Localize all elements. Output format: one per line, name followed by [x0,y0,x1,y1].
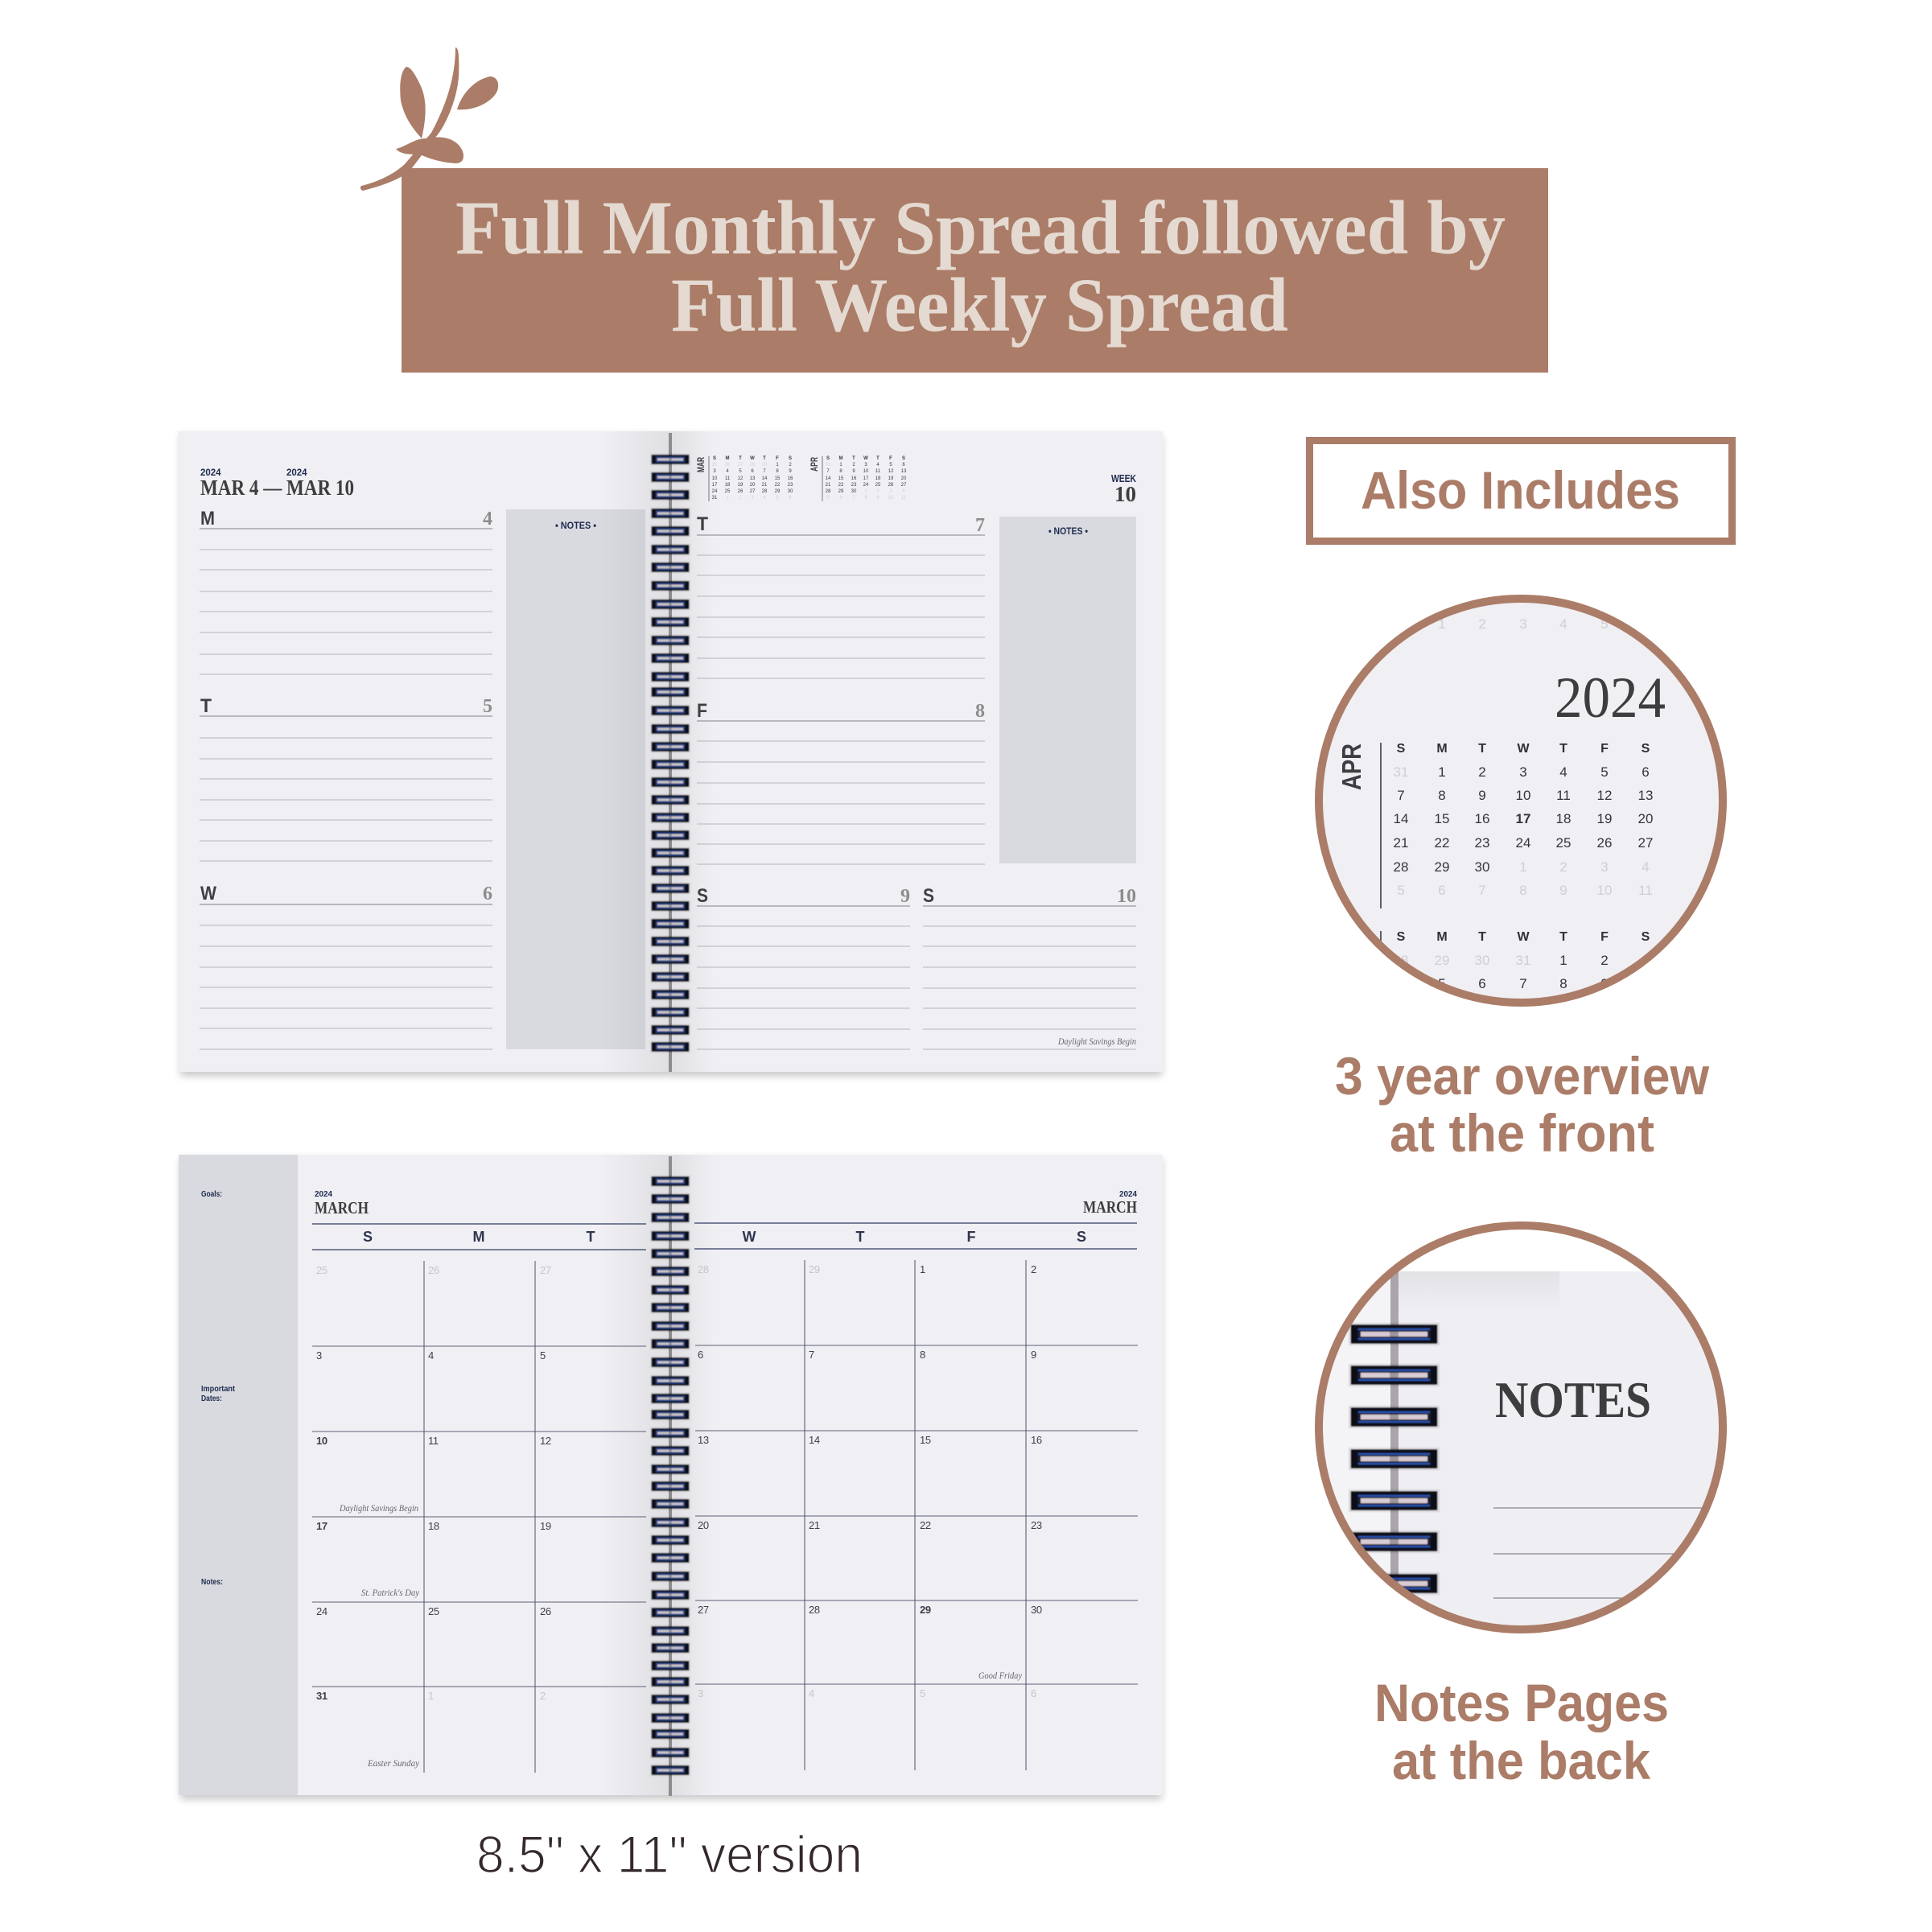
mini calendar: April: S [902,456,905,461]
mini calendar: March: M [726,456,729,461]
circle: 3 year overview calendar: W [1517,930,1530,944]
also includes box: Also Includes [1361,460,1680,520]
left page dates: 5 [540,1349,546,1361]
weekday headers: M [473,1229,484,1245]
left page dates: 18 [428,1520,439,1532]
holiday notes: St. Patrick's Day [361,1588,420,1598]
left page dates: 31 [316,1690,327,1702]
mini calendar: March: 3 [751,496,754,501]
left page dates: 25 [316,1264,327,1276]
mini calendar: April: 7 [852,496,855,501]
mini calendar: April: 2 [876,489,879,494]
right page dates [698,1263,1042,1699]
circle: 3 year overview calendar: S [1642,930,1650,944]
mini calendar: March: 24 [712,489,718,494]
right page dates: 7 [809,1349,814,1361]
mini calendar: March: 23 [788,483,793,488]
day labels: W [200,883,216,904]
mini calendar: April: 3 [864,463,867,468]
mini calendar: March: W [750,456,755,461]
circle: 3 year overview calendar: 23 [1475,835,1489,851]
circle: 3 year overview calendar: 12 [1597,788,1612,803]
circle: 3 year overview calendar: 10 [1597,883,1612,898]
circle: 3 year overview calendar: 4 [1642,859,1650,875]
mini calendar: April: 23 [851,483,857,488]
right page dates: 8 [920,1349,925,1361]
left page dates [316,1264,551,1702]
circle: 3 year overview calendar: 30 [1475,953,1489,968]
circle: 3 year overview calendar: 16 [1475,811,1489,826]
panel: left notes column [506,509,645,1049]
caption: notes pages: at the back [1392,1731,1650,1790]
right page dates: 29 [809,1263,820,1275]
mini calendar: March: 28 [762,489,768,494]
mini calendar: April: 24 [863,483,869,488]
mini calendar: April: 1 [864,489,867,494]
circle: 3 year overview calendar: F [1600,930,1609,944]
mini calendar: March: 3 [713,469,716,474]
banner title: Full Monthly Spread followed by [455,185,1506,270]
circle: 3 year overview calendar: 27 [1516,589,1530,604]
mini calendar: March: 27 [750,489,756,494]
circle: 3 year overview calendar: 7 [1519,976,1527,991]
mini calendar: March: 4 [763,496,766,501]
circle: 3 year overview calendar: 2 [1600,953,1609,968]
circle: 3 year overview calendar: 4 [1559,764,1567,780]
caption: 3 year overview [1335,1046,1710,1163]
mini calendar: April: 2 [852,463,855,468]
caption: 3 year overview: 3 year overview [1335,1046,1710,1106]
circle: 3 year overview calendar: 2 [1559,859,1567,875]
panel: right notes column [999,517,1136,863]
mini calendar: April: 14 [826,476,831,481]
panel: monthly sidebar: Important [201,1385,236,1394]
weekday headers [363,1229,1086,1245]
mini calendar: April: 9 [852,469,855,474]
left page dates: 17 [316,1520,327,1532]
left page dates: 10 [316,1435,327,1447]
mini calendar: April: 10 [863,469,869,474]
circle: 3 year overview calendar: 17 [1516,811,1530,826]
mini calendar: March: S [713,456,716,461]
mini calendar: April: 1 [839,463,842,468]
mini calendar: April: 10 [888,496,894,501]
mini calendar: April: T [852,456,855,461]
mini calendar: March: F [776,456,779,461]
mini calendar: March: 26 [725,463,731,468]
mini calendar: March: 17 [712,483,718,488]
mini calendar: April: 9 [876,496,879,501]
right page dates: 2 [1031,1263,1036,1275]
mini calendar: April: M [838,456,843,461]
circle: 3 year overview calendar: 6 [1478,976,1486,991]
left page dates: 1 [428,1690,434,1702]
mini calendar: March: T [763,456,766,461]
mini calendar: April: W [863,456,868,461]
also includes box [1310,441,1732,541]
mini calendar: March: 2 [739,496,742,501]
mini calendar: March: 4 [726,469,729,474]
right page dates: 14 [809,1434,820,1446]
left month heading [315,1189,369,1217]
right page dates: 1 [920,1263,925,1275]
circle: 3 year overview calendar: 3 [1519,616,1527,632]
calendar grid [312,1223,1138,1773]
circle: 3 year overview calendar: 5 [1600,616,1609,632]
mini calendar: April: 20 [901,476,907,481]
circle: 3 year overview calendar: 8 [1559,976,1567,991]
mini calendar: March: 13 [750,476,756,481]
mini calendar: March: 12 [738,476,744,481]
mini calendar: March: 2 [789,463,792,468]
mini calendar: April: 6 [902,463,905,468]
circle: 3 year overview calendar: 14 [1394,811,1408,826]
right page dates: 6 [1031,1687,1036,1699]
mini calendar: April: 11 [901,496,907,501]
mini calendar: April: 13 [901,469,907,474]
left page dates: 24 [316,1605,327,1617]
circle: 3 year overview calendar: 5 [1438,976,1446,991]
week date heading: 2024 [200,468,221,478]
circle: 3 year overview calendar: 30 [1475,859,1489,875]
circle: 3 year overview calendar: 1 [1559,953,1567,968]
banner [402,168,1548,373]
panel: monthly spread notebook [179,1155,1163,1799]
left page dates: 12 [540,1435,551,1447]
mini calendar: March: 5 [739,469,742,474]
circle: 3 year overview calendar: 26 [1597,835,1612,851]
mini calendar: March: 25 [712,463,718,468]
right page dates: 15 [920,1434,931,1446]
right page dates: 28 [809,1604,820,1616]
mini calendar: April: 25 [875,483,881,488]
circle: 3 year overview calendar: 2 [1478,616,1486,632]
left page dates: 27 [540,1264,551,1276]
left page dates: 3 [316,1349,322,1361]
circle: 3 year overview calendar: S [1397,742,1406,756]
mini calendar: April: 19 [888,476,894,481]
circle: 3 year overview calendar: 1 [1519,859,1527,875]
right page dates: 6 [698,1349,703,1361]
circle: 3 year overview calendar: 11 [1638,883,1653,898]
mini calendar: March: 31 [712,496,718,501]
ruled lines [200,529,1136,1049]
day labels: 10 [1117,886,1136,907]
mini calendar: April: 7 [826,469,830,474]
right page dates: 4 [809,1687,814,1699]
day labels: 4 [483,509,492,529]
circle: 3 year overview calendar: F [1600,742,1609,756]
left page dates: 26 [428,1264,439,1276]
mini calendar: March: 15 [775,476,781,481]
circle: 3 year overview calendar: 9 [1478,788,1486,803]
circle: 3 year overview calendar: T [1478,742,1486,756]
right page dates: 9 [1031,1349,1036,1361]
circle: 3 year overview calendar: 19 [1597,811,1612,826]
mini calendar: April: 21 [826,483,831,488]
mini calendar: April [809,456,907,501]
right page dates: 28 [698,1263,709,1275]
circle: 3 year overview calendar: W [1517,742,1530,756]
circle: 3 year overview calendar: 2024 [1555,665,1666,730]
right page dates: 13 [698,1434,709,1446]
mini calendar: April: 4 [902,489,905,494]
day labels: T [697,513,708,535]
mini calendar: March: 29 [762,463,768,468]
circle: 3 year overview calendar: 6 [1438,883,1446,898]
circle: 3 year overview calendar: 27 [1638,835,1653,851]
right page dates: 20 [698,1519,709,1531]
circle: 3 year overview calendar: 8 [1438,788,1446,803]
circle: 3 year overview calendar: 7 [1478,883,1486,898]
panel: monthly sidebar: Dates: [201,1394,222,1403]
panel: monthly sidebar [179,1155,298,1795]
mini calendar: April: 16 [851,476,857,481]
circle: 3 year overview calendar: 31 [1394,764,1408,780]
circle: 3 year overview calendar: 28 [1394,953,1408,968]
icon: leaf sprig [360,47,498,191]
week date heading [200,468,354,500]
right page dates: 29 [920,1604,931,1616]
weekday headers: F [967,1229,975,1245]
circle: 3 year overview calendar: 11 [1556,788,1571,803]
left page dates: 4 [428,1349,434,1361]
mini calendar: March: T [739,456,742,461]
mini calendar: March: 28 [750,463,756,468]
circle: 3 year overview calendar: 9 [1600,976,1609,991]
mini calendar: March: 25 [725,489,731,494]
right page dates: 23 [1031,1519,1042,1531]
day labels: S [697,885,708,907]
left month heading: 2024 [315,1189,332,1199]
mini calendar: April: 17 [863,476,869,481]
circle: 3 year overview calendar: 21 [1394,835,1408,851]
day labels: M [200,508,215,529]
mini calendar: March: 16 [788,476,793,481]
week number: 10 [1114,482,1136,506]
circle: 3 year overview calendar: 2 [1478,764,1486,780]
mini calendar: April: 27 [901,483,907,488]
mini calendar: March: 27 [738,463,744,468]
circle: notes pages closeup: NOTES [1495,1372,1651,1428]
circle: 3 year overview calendar: M [1436,930,1448,944]
mini calendar: April: 28 [826,489,831,494]
left page dates: 19 [540,1520,551,1532]
circle: 3 year overview calendar: 5 [1397,883,1405,898]
day labels: F [697,700,707,722]
circle: 3 year overview calendar: 20 [1638,811,1653,826]
right month heading: 2024 [1119,1189,1137,1199]
circle: 3 year overview calendar: 3 [1519,764,1527,780]
event note: Daylight Savings Begin [1057,1037,1136,1047]
mini calendar: April: 15 [838,476,844,481]
circle: 3 year overview calendar: 29 [1435,859,1449,875]
panel: left notes column: • NOTES • [555,520,596,531]
circle: 3 year overview calendar: 25 [1556,835,1571,851]
circle: 3 year overview calendar: 1 [1438,616,1446,632]
holiday notes: Easter Sunday [367,1759,420,1769]
size caption: 8.5" x 11" version [476,1825,863,1884]
spiral binding [650,433,690,1072]
circle: 3 year overview calendar: S [1642,742,1650,756]
mini calendar: April: 8 [864,496,867,501]
mini calendar: March: 14 [762,476,768,481]
week date heading: MAR 4 — MAR 10 [200,476,354,500]
right page dates: 21 [809,1519,820,1531]
mini calendar: April: S [826,456,830,461]
left page dates: 26 [540,1605,551,1617]
circle: 3 year overview calendar: 3 [1600,859,1609,875]
holiday notes: Daylight Savings Begin [339,1504,418,1514]
mini calendar: April: 4 [876,463,879,468]
mini calendar: March: 5 [776,496,779,501]
mini calendar: March: 6 [789,496,792,501]
left page dates: 2 [540,1690,546,1702]
circle: 3 year overview calendar: 7 [1397,788,1405,803]
circle: 3 year overview calendar: 28 [1394,859,1408,875]
circle: 3 year overview calendar [1319,589,1723,1003]
mini calendar: March: 1 [776,463,779,468]
mini calendar: March: 20 [750,483,756,488]
left page dates: 25 [428,1605,439,1617]
circle: 3 year overview calendar: 1 [1438,764,1446,780]
mini calendar: March: 7 [763,469,766,474]
weekday headers: T [856,1229,864,1245]
circle: 3 year overview calendar: T [1559,742,1567,756]
mini calendar: April: 11 [875,469,881,474]
day labels: T [200,695,212,717]
right page dates: 3 [698,1687,703,1699]
week number: WEEK [1111,472,1136,484]
spiral binding [650,1156,690,1796]
right page dates: 30 [1031,1604,1042,1616]
holiday notes [339,1504,1023,1769]
circle: 3 year overview calendar: M [1436,742,1448,756]
mini calendar: March: 19 [738,483,744,488]
circle: 3 year overview calendar: S [1397,930,1406,944]
caption: 3 year overview: at the front [1390,1103,1654,1163]
circle: 3 year overview calendar: 8 [1519,883,1527,898]
mini calendar: March: 1 [726,496,729,501]
circle: 3 year overview calendar: T [1478,930,1486,944]
weekday headers: W [742,1229,756,1245]
weekday headers: T [586,1229,595,1245]
mini calendar: March: 6 [751,469,754,474]
week date heading: 2024 [286,468,307,478]
mini calendar: April: 8 [839,469,842,474]
circle: 3 year overview calendar: 9 [1559,883,1567,898]
right page dates: 16 [1031,1434,1042,1446]
panel: monthly sidebar: Goals: [201,1190,222,1199]
left page dates: 11 [428,1435,439,1447]
mini calendar: March: 22 [775,483,781,488]
circle: notes pages closeup [1304,1226,1736,1642]
mini calendar: April: 30 [851,489,857,494]
left month heading: MARCH [315,1198,369,1217]
right page dates: 22 [920,1519,931,1531]
right page dates: 5 [920,1687,925,1699]
caption: notes pages [1374,1673,1669,1790]
mini calendar: April: 5 [826,496,830,501]
mini calendar: April: 5 [889,463,892,468]
circle: 3 year overview calendar: 31 [1516,953,1530,968]
mini calendar: March: 11 [725,476,731,481]
mini calendar: March: 21 [762,483,768,488]
weekday headers: S [363,1229,373,1245]
mini calendar: April: 12 [888,469,894,474]
panel: right notes column: • NOTES • [1048,525,1088,537]
mini calendar: April: 26 [888,483,894,488]
mini calendar: March: 10 [712,476,718,481]
day labels: 8 [975,701,985,722]
circle: 3 year overview calendar: 4 [1559,616,1567,632]
holiday notes: Good Friday [978,1671,1023,1681]
circle: 3 year overview calendar: 15 [1435,811,1449,826]
banner title [455,185,1506,348]
panel: monthly sidebar: Notes: [201,1578,223,1587]
day labels: 9 [900,886,910,907]
circle: 3 year overview calendar: 18 [1556,811,1571,826]
mini calendar: April: 31 [826,463,831,468]
circle: 3 year overview calendar: 22 [1435,835,1449,851]
right month heading [1083,1189,1137,1217]
mini calendar: March: 8 [776,469,779,474]
day labels: 5 [483,696,492,717]
mini calendar: March: 18 [725,483,731,488]
right page dates: 27 [698,1604,709,1616]
mini calendar: April: 22 [838,483,844,488]
banner title: Full Weekly Spread [671,262,1288,348]
mini calendar: March: 29 [775,489,781,494]
panel: weekly spread notebook [178,431,1163,1076]
caption: notes pages: Notes Pages [1374,1673,1669,1732]
mini calendar: April: 29 [838,489,844,494]
circle: 3 year overview calendar: 13 [1638,788,1653,803]
mini calendar: April: T [876,456,879,461]
right month heading: MARCH [1083,1197,1137,1217]
circle: 3 year overview calendar: 10 [1516,788,1530,803]
mini calendar: April: APR [809,457,820,472]
mini calendar: April: F [889,456,892,461]
week number [1111,472,1136,506]
mini calendar: March: 26 [738,489,744,494]
day labels [200,508,1136,907]
circle: 3 year overview calendar: 29 [1435,953,1449,968]
circle: 3 year overview calendar: APR [1337,744,1366,790]
mini calendar: March: MAR [695,457,706,472]
mini calendar: April: 3 [889,489,892,494]
circle: 3 year overview calendar: 24 [1516,835,1530,851]
mini calendar: March: S [789,456,792,461]
weekday headers: S [1077,1229,1086,1245]
mini calendar: April: 18 [875,476,881,481]
mini calendar: March [695,456,793,501]
day labels: S [923,885,934,907]
mini calendar: March: 9 [789,469,792,474]
circle: 3 year overview calendar: 6 [1642,764,1650,780]
mini calendar: March: 30 [788,489,793,494]
day labels: 6 [483,884,492,904]
circle: 3 year overview calendar: T [1559,930,1567,944]
mini calendar: April: 6 [839,496,842,501]
circle: 3 year overview calendar: 5 [1600,764,1609,780]
day labels: 7 [975,515,985,536]
